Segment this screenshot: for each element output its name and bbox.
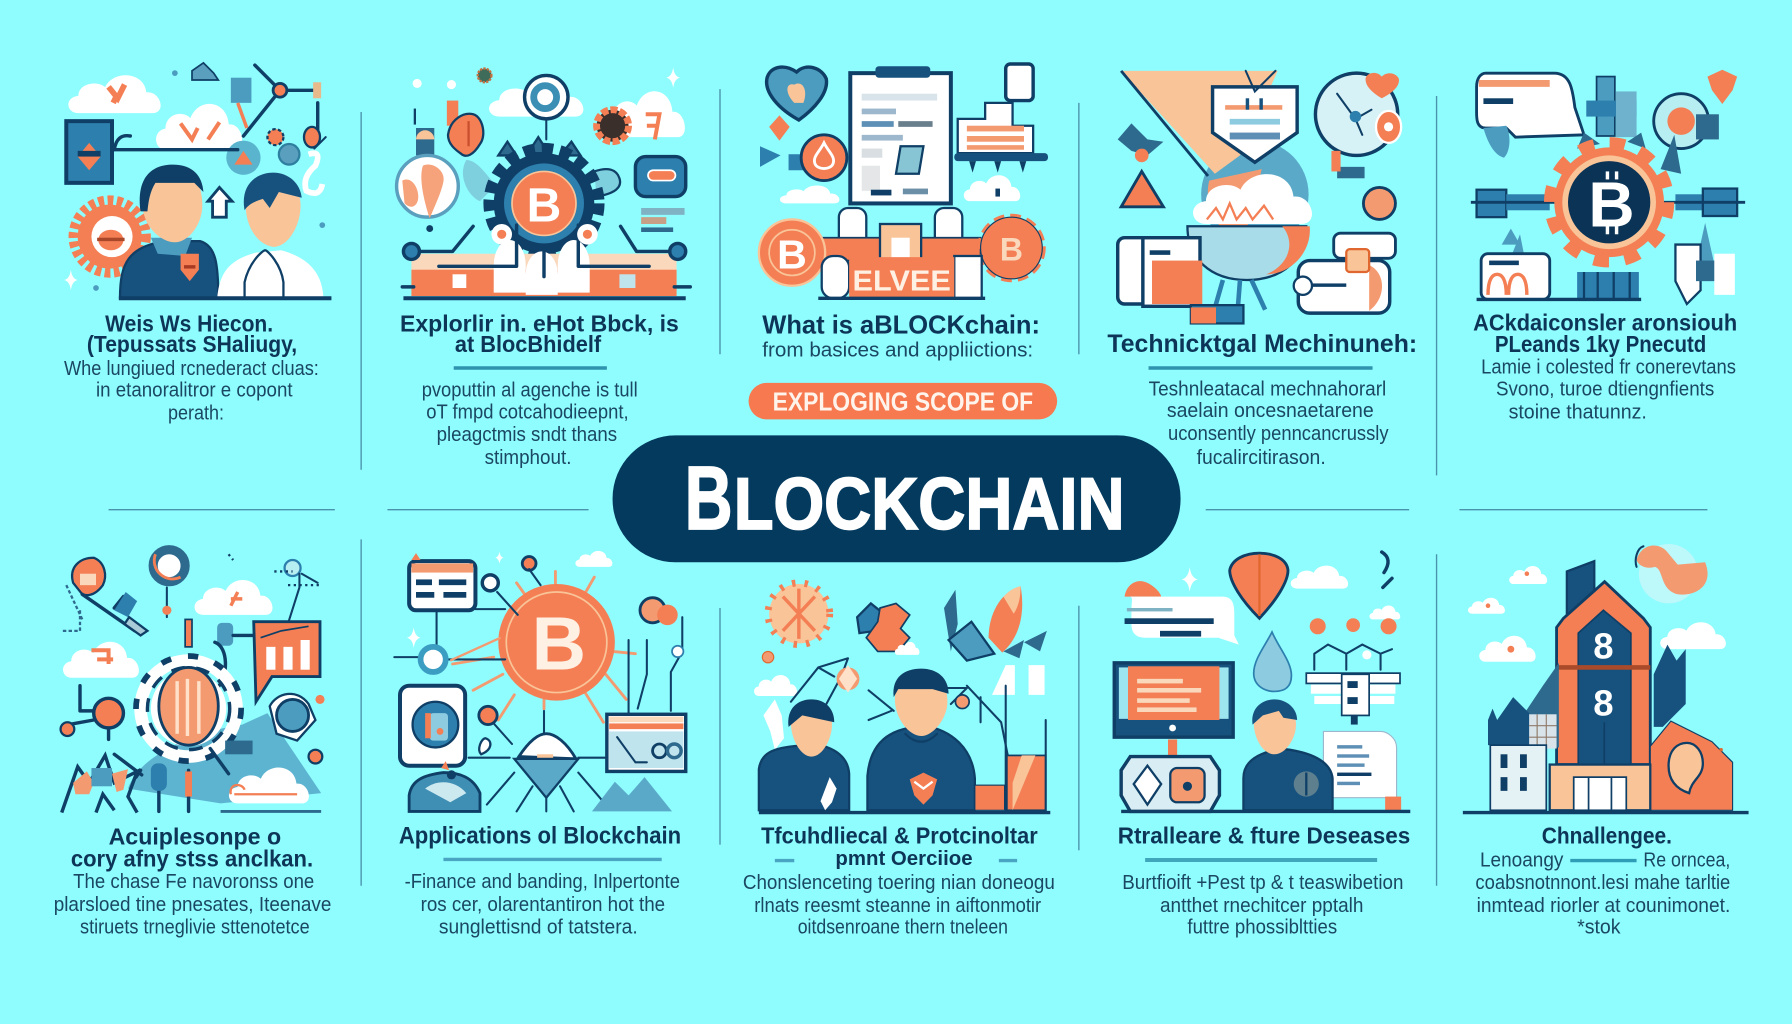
text block: bottom 5 <box>1475 822 1730 939</box>
icon: clipboard with coins <box>759 64 1048 298</box>
panel: top 3 what is blockchain <box>759 64 1048 362</box>
text block: top 3 <box>762 310 1040 362</box>
text block: bottom 5: Re orncea, <box>1643 849 1730 871</box>
icon: people with rocket <box>754 583 1050 813</box>
text block: bottom 4: antthet rnechitcer pptalh <box>1160 895 1363 917</box>
text block: bottom 2: sunglettisnd of tatstera. <box>439 917 638 939</box>
text block: bottom 1 <box>54 824 331 939</box>
title: blockchain <box>613 435 1181 562</box>
text block: top 4 <box>1107 330 1417 469</box>
text block: bottom 3: rlnats reesmt steanne in aiftonmotir <box>754 895 1041 917</box>
text block: top 5: stoine thatunnz. <box>1509 401 1647 423</box>
text block: top 2 <box>400 310 679 469</box>
text block: bottom 5: Chnallengee. <box>1542 822 1672 848</box>
text block: top 1: (Tepussats SHaliugy, <box>87 331 297 357</box>
text block: top 1 <box>64 310 319 424</box>
text block: top 2: stimphout. <box>485 447 571 469</box>
text block: bottom 5: inmtead riorler at counimonet. <box>1477 895 1730 917</box>
text block: top 2: at BlocBhidelf <box>455 331 601 357</box>
text block: top 1: Whe lungiued rcnederact cluas: <box>64 358 319 380</box>
panel: top 5 bitcoin gear <box>1471 70 1745 423</box>
text block: bottom 5: *stok <box>1577 917 1622 939</box>
panel: top 1 partnership <box>64 63 331 424</box>
text block: bottom 1: plarsloed tine pnesates, Iteenave <box>54 894 331 916</box>
text block: bottom 5: coabsnotnnont.lesi mahe tarltie <box>1475 872 1730 894</box>
panel: bottom 4 real world and future <box>1114 552 1410 939</box>
panel: bottom 2 applications <box>394 551 686 939</box>
icon: tower buildings: 8 <box>1593 625 1614 666</box>
title: blockchain: B <box>685 448 733 549</box>
icon: clipboard with coins: ELVEE <box>853 265 951 297</box>
text block: top 4: uconsently penncancrussly <box>1168 423 1389 445</box>
panel: top 2 exploring <box>397 67 690 469</box>
title: blockchain: LOCKCHAIN <box>734 464 1125 545</box>
icon: gear with charts and clouds <box>61 550 325 813</box>
text block: bottom 4 <box>1118 822 1410 939</box>
icon: clipboard with coins: B <box>1000 232 1023 268</box>
text block: top 2: Explorlir in. eHot Bbck, is <box>400 310 679 336</box>
icon: tower buildings: 8 <box>1593 682 1614 723</box>
text block: bottom 3 <box>743 822 1055 939</box>
text block: top 3: What is aBLOCKchain: <box>762 310 1040 340</box>
icon: orange gear with bitcoin: B <box>1588 168 1635 240</box>
text block: top 1: in etanoralitror e copont <box>96 380 293 402</box>
panel: bottom 1 core concepts <box>54 550 331 939</box>
text block: top 4: fucalircitirason. <box>1197 447 1326 469</box>
text block: bottom 3: Chonslenceting toering nian doneogu <box>743 872 1055 894</box>
text block: bottom 3: oitdsenroane thern tneleen <box>798 917 1008 939</box>
text block: top 5 <box>1473 309 1737 423</box>
text block: top 5: Lamie i colested fr conerevtans <box>1481 357 1736 379</box>
icon: monitor, person, server <box>1114 552 1410 811</box>
text block: bottom 1: The chase Fe navoronss one <box>73 871 314 893</box>
text block: top 4: Teshnleatacal mechnahorarl <box>1149 378 1386 400</box>
panel: bottom 3 technical and protocol <box>743 583 1055 939</box>
text block: bottom 2: Applications ol Blockchain <box>399 822 681 849</box>
text block: bottom 4: Rtralleare & fture Deseases <box>1118 822 1410 848</box>
panel: top 4 technical mechanisms <box>1107 71 1417 469</box>
text block: bottom 2 <box>399 822 681 939</box>
icon: bitcoin sun network: B <box>532 602 586 686</box>
text block: top 2: oT fmpd cotcahodieepnt, <box>426 401 629 423</box>
icon: bitcoin gear machine: B <box>527 180 561 233</box>
text block: top 5: PLeands 1ky Pnecutd <box>1495 331 1706 357</box>
tag: exploring scope of: EXPLOGING SCOPE OF <box>773 388 1033 416</box>
panel: bottom 5 challenges <box>1463 544 1749 939</box>
icon: orange gear with bitcoin <box>1471 70 1745 304</box>
text block: top 1: perath: <box>168 402 224 424</box>
text block: top 2: pvoputtin al agenche is tull <box>422 380 638 402</box>
text block: top 5: ACkdaiconsler aronsiouh <box>1473 309 1737 335</box>
text block: bottom 3: Tfcuhdliecal & Protcinoltar <box>761 822 1038 848</box>
text block: top 1: Weis Ws Hiecon. <box>105 310 273 336</box>
icon: clipboard with coins: B <box>777 232 807 278</box>
text block: bottom 1: cory afny stss anclkan. <box>71 845 313 871</box>
text block: bottom 4: Burtfioift +Pest tp & t teaswibetion <box>1122 872 1403 894</box>
text block: top 5: Svono, turoe dtiengnfients <box>1496 378 1714 400</box>
text block: bottom 1: stiruets trneglivie sttenotetce <box>80 917 310 939</box>
text block: top 2: pleagctmis sndt thans <box>437 424 617 446</box>
text block: bottom 2: ros cer, olarentantiron hot the <box>421 894 665 916</box>
icon: tower buildings <box>1463 544 1749 813</box>
text block: bottom 2: -Finance and banding, Inlpertonte <box>405 871 680 893</box>
text block: bottom 1: Acuiplesonpe o <box>109 824 281 850</box>
text block: bottom 4: futtre phossibltties <box>1187 917 1337 939</box>
tag: exploring scope of <box>749 383 1057 419</box>
icon: bitcoin gear machine <box>397 67 690 298</box>
text block: top 4: Technicktgal Mechinuneh: <box>1107 330 1417 358</box>
icon: bitcoin sun network <box>394 551 686 811</box>
icon: shield, cloud and documents <box>1118 71 1401 323</box>
icon: two people with network and clouds <box>64 63 331 298</box>
text block: bottom 3: pmnt Oerciioe <box>835 847 973 870</box>
text block: top 4: saelain oncesnaetarene <box>1167 400 1374 422</box>
text block: top 3: from basices and appliictions: <box>762 340 1033 362</box>
text block: bottom 5: Lenoangy <box>1480 849 1563 871</box>
